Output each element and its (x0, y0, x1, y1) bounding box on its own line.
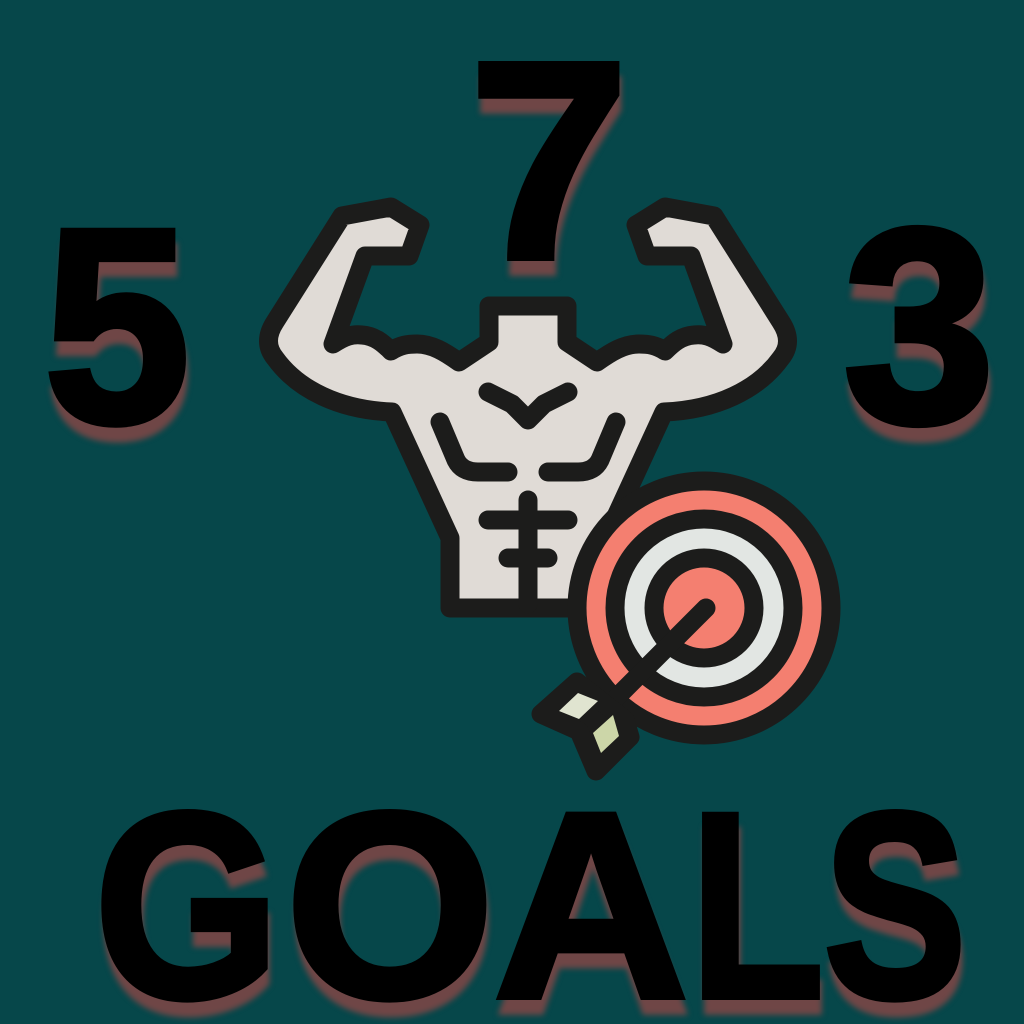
icon: target with arrow (541, 481, 831, 771)
title: GOALS (94, 757, 967, 1024)
chest line (488, 392, 568, 420)
number 7: 7 (469, 4, 629, 318)
abdominal lines (488, 500, 568, 604)
arrow feather left (559, 693, 598, 719)
arrow shaft (610, 608, 706, 704)
right pectoral line (548, 422, 616, 472)
icon: muscular torso (268, 207, 788, 608)
bullseye (654, 558, 754, 658)
middle ring (615, 519, 793, 697)
arrow feather right (593, 715, 619, 753)
left pectoral line (440, 422, 508, 472)
number 5: 5 (44, 172, 190, 481)
torso silhouette (268, 207, 788, 608)
number 3: 3 (843, 171, 995, 481)
outer ring (577, 481, 831, 735)
arrow fletching base (541, 682, 630, 771)
